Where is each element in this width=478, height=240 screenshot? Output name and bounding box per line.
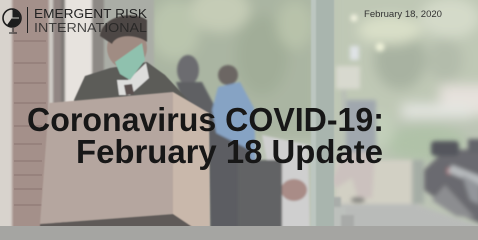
title: February 18 Update	[76, 133, 383, 170]
logo wordmark: INTERNATIONAL	[34, 21, 147, 35]
blurred trees	[140, 0, 478, 161]
title	[27, 101, 384, 170]
brick courses	[14, 40, 46, 206]
logo: Emergent Risk International	[3, 7, 148, 35]
man in face mask	[74, 15, 190, 112]
bicycle and railings	[238, 135, 354, 240]
lamp and sign	[336, 14, 384, 120]
walking pedestrian	[331, 100, 376, 203]
lamp post	[311, 0, 334, 240]
logo wordmark: EMERGENT RISK	[34, 7, 148, 21]
parked motorcycles	[424, 139, 478, 240]
figures in the background	[176, 55, 256, 240]
left brick column	[0, 0, 154, 240]
cardboard box	[40, 92, 212, 240]
logo wordmark	[34, 7, 148, 35]
date: February 18, 2020	[364, 9, 442, 20]
icon: globe	[3, 9, 21, 33]
fence and pavement	[335, 160, 478, 240]
title: Coronavirus COVID-19:	[27, 101, 384, 138]
